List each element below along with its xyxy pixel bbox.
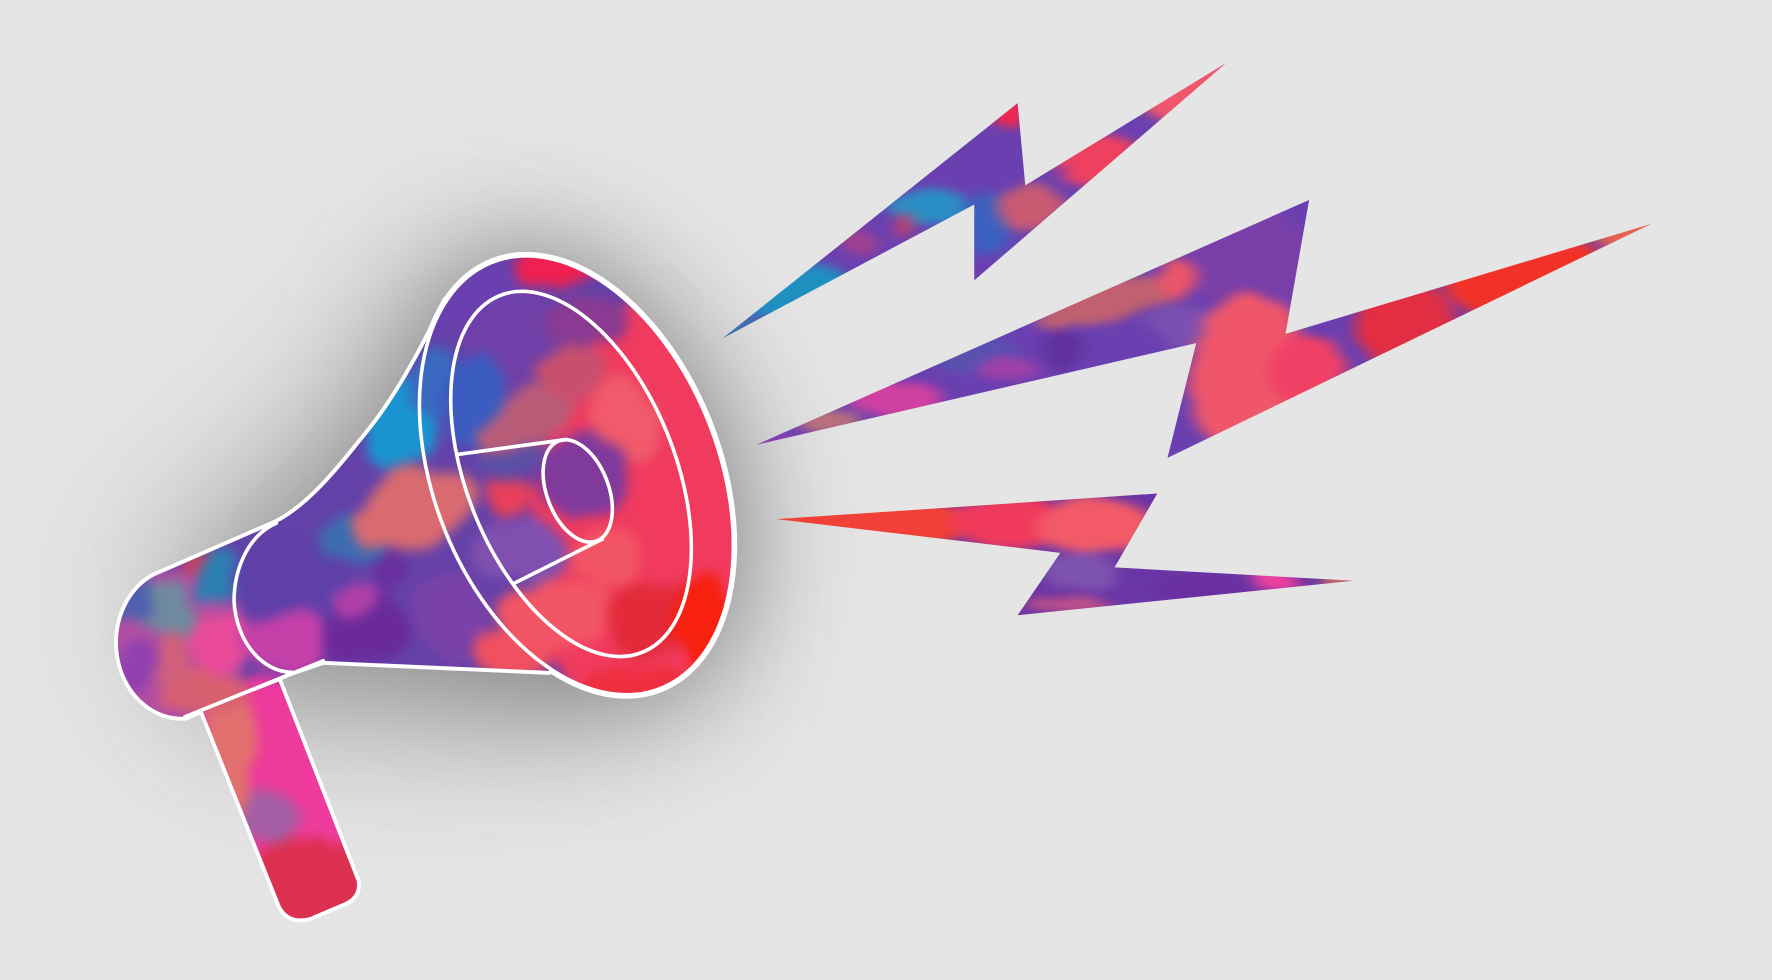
bell colours xyxy=(438,258,732,693)
bolt: middle xyxy=(756,200,1652,458)
rear cap colours xyxy=(107,551,245,725)
bolt: bottom xyxy=(777,494,1354,616)
handle colours xyxy=(192,679,370,936)
white sticker outline xyxy=(118,207,794,918)
bolt: top xyxy=(722,63,1226,338)
soft drop shadow behind megaphone xyxy=(130,200,805,750)
watercolor fill xyxy=(118,258,732,918)
inner line work xyxy=(185,207,794,744)
megaphone xyxy=(114,252,738,922)
lightning bolts xyxy=(722,63,1652,616)
illustration: megaphone shouting lightning bolts xyxy=(96,63,1652,922)
body colours xyxy=(232,344,558,679)
